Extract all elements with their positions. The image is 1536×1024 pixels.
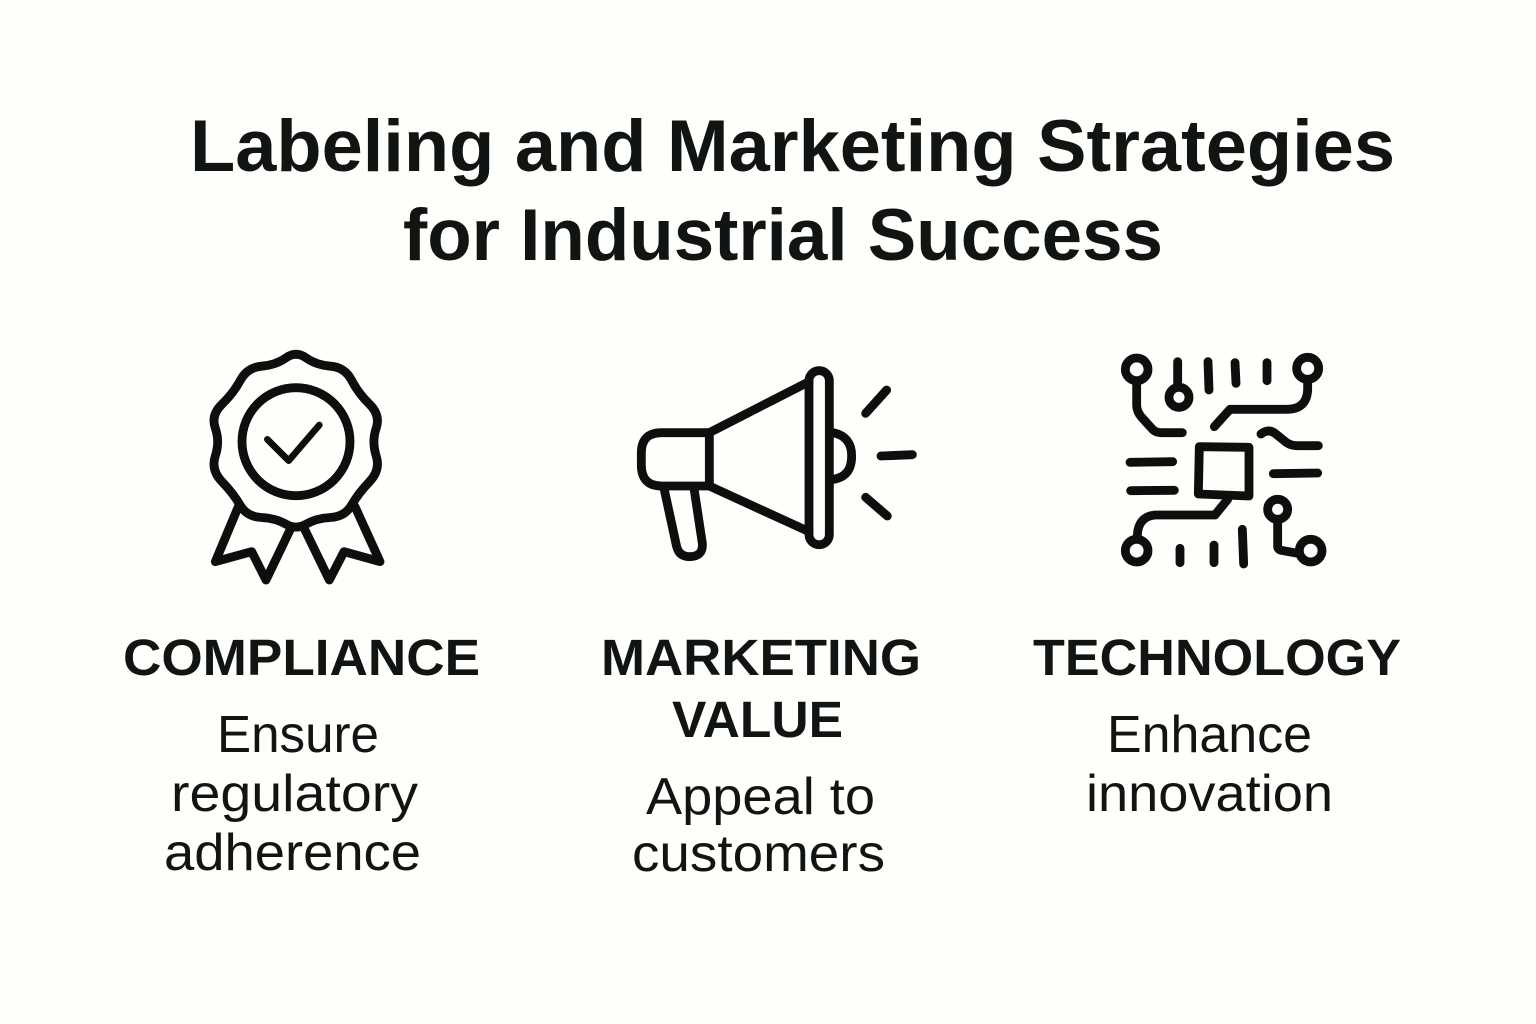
icon: award rosette with check mark — [214, 354, 380, 580]
icon: circuit board — [1125, 357, 1322, 564]
text: technology description — [1086, 706, 1333, 823]
text: compliance description: regulatory — [171, 765, 418, 823]
title — [190, 106, 1395, 276]
text: marketing description: customers — [632, 825, 885, 883]
text: technology description: innovation — [1086, 765, 1333, 823]
heading: marketing value: MARKETING — [601, 629, 921, 686]
text: compliance description: Ensure — [217, 706, 379, 764]
panel: compliance — [123, 354, 480, 882]
icon: megaphone — [641, 371, 912, 557]
heading: marketing value: VALUE — [672, 691, 843, 748]
text: technology description: Enhance — [1107, 706, 1312, 764]
text: compliance description: adherence — [164, 824, 421, 882]
text: compliance description — [164, 706, 421, 882]
panel: technology — [1033, 357, 1401, 823]
heading: marketing value — [601, 629, 921, 748]
heading: technology: TECHNOLOGY — [1033, 629, 1401, 686]
text: marketing description: Appeal to — [646, 768, 875, 826]
title: for Industrial Success — [403, 195, 1163, 276]
heading: compliance: COMPLIANCE — [123, 629, 480, 686]
panel: marketing value — [601, 371, 921, 883]
text: marketing description — [632, 768, 885, 883]
title: Labeling and Marketing Strategies — [190, 106, 1395, 187]
